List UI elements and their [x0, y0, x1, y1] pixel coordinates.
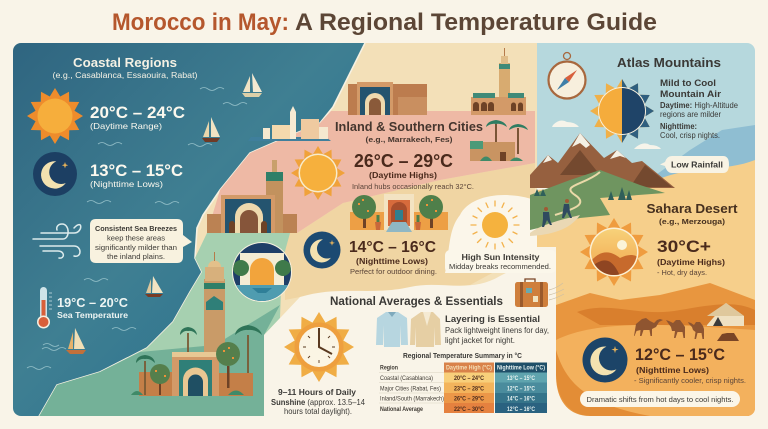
coastal daytime temperature	[90, 103, 185, 131]
sunshine text	[271, 387, 365, 416]
coastal heading: (e.g., Casablanca, Essaouira, Rabat)	[52, 71, 198, 80]
illustration: mountains and hikers	[530, 121, 675, 236]
illustration: camels and tents	[634, 303, 744, 341]
sahara nighttime temperature	[634, 345, 746, 385]
sahara nighttime temperature: - Significantly cooler, crisp nights.	[634, 376, 746, 385]
icon: compass	[548, 52, 586, 98]
sea temperature: Sea Temperature	[57, 311, 129, 320]
inland heading	[335, 120, 483, 144]
icon: inland moon	[304, 232, 340, 268]
atlas description: Cool, crisp nights.	[660, 131, 720, 140]
sahara nighttime temperature: (Nighttime Lows)	[636, 365, 709, 375]
icon: half sun half moon	[590, 79, 654, 143]
temperature summary table: Regional Temperature Summary in °C	[403, 351, 523, 360]
coastal heading	[52, 55, 198, 80]
layering text: Pack lightweight linens for day,	[445, 326, 549, 335]
temperature summary table: Coastal (Casablanca)	[380, 375, 433, 382]
icon: sunshine clock	[284, 312, 354, 382]
inland daytime temperature: Inland hubs occasionally reach 32°C.	[352, 182, 474, 191]
sahara nighttime temperature: 12°C – 15°C	[635, 345, 725, 364]
sunshine text: 9–11 Hours of Daily	[278, 387, 356, 397]
temperature summary table: Daytime High (°C)	[446, 364, 492, 372]
icon: coastal sun	[27, 88, 83, 144]
title: A Regional Temperature Guide	[295, 9, 657, 36]
illustration: coastal town	[248, 106, 331, 141]
panel: inland and southern cities	[131, 48, 528, 396]
sahara daytime temperature: - Hot, dry days.	[657, 268, 707, 277]
inland heading: (e.g., Marrakech, Fes)	[366, 135, 453, 144]
temperature summary table: National Average	[380, 406, 423, 413]
title	[112, 9, 657, 36]
temperature summary table: 26°C – 29°C	[454, 394, 484, 402]
temperature summary table: 23°C – 28°C	[454, 384, 484, 392]
callout: dramatic shifts	[580, 391, 740, 407]
temperature summary table: 14°C – 16°C	[507, 394, 535, 402]
inland heading: Inland & Southern Cities	[335, 120, 483, 134]
inland nighttime temperature: Perfect for outdoor dining.	[350, 267, 437, 276]
icon: coastal moon	[33, 152, 77, 196]
coastal nighttime temperature	[90, 161, 183, 189]
temperature summary table: Region	[380, 364, 398, 372]
icon: desert moon	[582, 338, 628, 382]
layering text: Layering is Essential	[445, 314, 540, 325]
temperature summary table: 13°C – 15°C	[507, 374, 535, 382]
icon: inland sun	[291, 146, 345, 200]
temperature summary table: Inland/South (Marrakech)	[380, 396, 444, 402]
callout: low rainfall: Low Rainfall	[671, 160, 723, 170]
illustration: lower mosque and palms	[131, 252, 262, 396]
atlas heading: Atlas Mountains	[617, 56, 721, 70]
sahara daytime temperature: 30°C+	[657, 237, 711, 256]
temperature summary table: 22°C – 30°C	[454, 405, 484, 413]
panel: high sun intensity	[445, 201, 556, 273]
illustration: city gate large	[207, 160, 297, 233]
atlas description: Nighttime:	[660, 122, 697, 131]
sea temperature: 19°C – 20°C	[57, 295, 129, 310]
sea waves	[27, 88, 247, 370]
sahara daytime temperature: (Daytime Highs)	[657, 257, 725, 267]
coastal daytime temperature: 20°C – 24°C	[90, 103, 185, 122]
icon: suitcase	[515, 279, 564, 307]
inland daytime temperature: 26°C – 29°C	[354, 151, 453, 171]
panel: coastal regions	[27, 55, 262, 370]
inland nighttime temperature: (Nighttime Lows)	[356, 256, 428, 266]
panel: atlas mountains	[530, 52, 739, 236]
callout: sea breezes: Consistent Sea Breezes	[95, 224, 177, 233]
panel: national averages	[271, 279, 564, 416]
callout: sea breezes: the inland plains.	[107, 252, 165, 261]
atlas description	[660, 78, 739, 140]
icon: thermometer	[37, 287, 52, 328]
atlas description: Daytime: High-Altitude	[660, 101, 739, 110]
atlas description: Mild to Cool	[660, 78, 716, 89]
illustration: palms and kasbah	[470, 120, 528, 161]
atlas description: Mountain Air	[660, 89, 721, 100]
high sun text: High Sun Intensity	[462, 252, 540, 262]
temperature summary table: 12°C – 16°C	[507, 405, 535, 413]
sahara heading: (e.g., Merzouga)	[659, 217, 726, 226]
sunshine text: Sunshine (approx. 13.5–14	[271, 397, 365, 407]
inland nighttime temperature: 14°C – 16°C	[349, 239, 436, 256]
high sun text: Midday breaks recommended.	[449, 262, 551, 271]
illustration: minaret top	[471, 48, 526, 115]
illustration: courtyard fountain	[232, 242, 292, 305]
sailboats	[66, 73, 262, 354]
icon: desert sun	[580, 218, 648, 286]
icon: sun with rays	[471, 201, 519, 249]
layering text: light jacket for night.	[445, 336, 515, 345]
sunshine text: hours total daylight).	[284, 406, 352, 416]
temperature summary table	[379, 351, 547, 413]
panel: sahara desert	[580, 202, 746, 407]
temperature summary table: Major Cities (Rabat, Fes)	[380, 386, 441, 392]
sahara daytime temperature	[657, 237, 725, 277]
sea temperature	[57, 295, 129, 320]
coastal nighttime temperature: 13°C – 15°C	[90, 161, 183, 180]
illustration: city gate top	[348, 82, 427, 115]
temperature summary table: Nighttime Low (°C)	[497, 364, 545, 372]
inland daytime temperature	[352, 151, 474, 191]
callout: dramatic shifts: Dramatic shifts from hot days to cool nights.	[586, 395, 734, 404]
inland daytime temperature: (Daytime Highs)	[369, 170, 437, 180]
high sun text	[445, 250, 556, 273]
illustration: riad orchard	[350, 194, 448, 232]
coastal heading: Coastal Regions	[73, 55, 177, 70]
inland nighttime temperature	[349, 239, 437, 276]
temperature summary table: 12°C – 15°C	[507, 384, 535, 392]
icon: wind	[33, 224, 81, 258]
sahara heading: Sahara Desert	[646, 202, 738, 216]
temperature summary table: 20°C – 24°C	[454, 374, 484, 382]
callout: sea breezes: keep these areas	[107, 234, 165, 242]
coastal daytime temperature: (Daytime Range)	[90, 121, 162, 131]
icon: shirt and jacket	[376, 312, 441, 347]
coastal nighttime temperature: (Nighttime Lows)	[90, 179, 163, 189]
callout: low rainfall	[660, 156, 729, 173]
atlas description: regions are milder	[660, 110, 721, 119]
callout: sea breezes: significantly milder than	[95, 243, 177, 252]
layering text	[445, 314, 549, 345]
sahara heading	[646, 202, 738, 226]
title: Morocco in May:	[112, 9, 289, 36]
callout: sea breezes	[90, 219, 192, 263]
national heading: National Averages & Essentials	[330, 294, 503, 308]
